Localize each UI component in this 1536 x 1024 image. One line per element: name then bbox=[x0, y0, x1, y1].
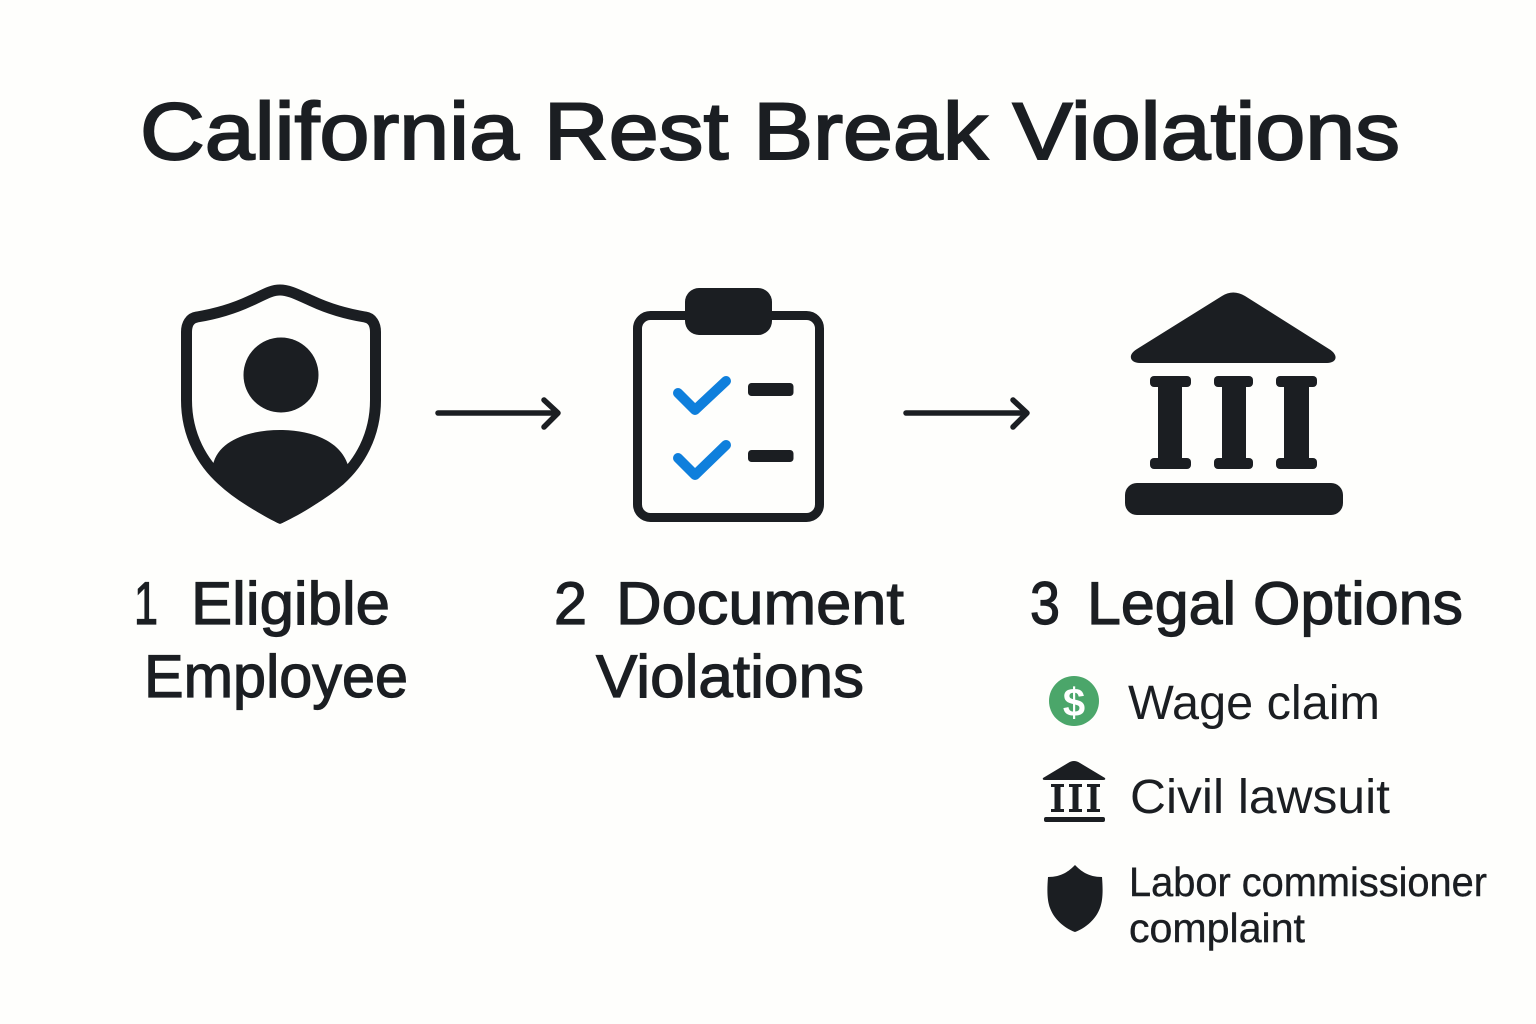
option: civil lawsuit bbox=[1043, 761, 1390, 824]
step 1 heading: Eligible bbox=[191, 570, 390, 637]
label: wage claim: Wage claim bbox=[1128, 677, 1380, 730]
icon: green dollar coin bbox=[1049, 676, 1099, 726]
option: wage claim bbox=[1049, 676, 1380, 730]
step 2 heading: 2 bbox=[554, 570, 587, 637]
step 1 heading bbox=[134, 570, 408, 710]
step 3: legal options bbox=[1030, 292, 1487, 951]
step 2 heading: Document bbox=[616, 570, 904, 637]
step 3 heading: Legal Options bbox=[1087, 570, 1463, 637]
icon: clipboard checklist bbox=[638, 288, 820, 518]
step 2: document violations bbox=[554, 288, 904, 710]
icon: green dollar coin: $ bbox=[1063, 681, 1085, 725]
step 1: eligible employee bbox=[134, 290, 408, 710]
arrow: step 2 to step 3 bbox=[906, 400, 1027, 427]
step 3 heading: 3 bbox=[1030, 570, 1060, 637]
step 2 heading: Violations bbox=[596, 643, 864, 710]
arrow: step 1 to step 2 bbox=[438, 400, 558, 427]
icon: courthouse bbox=[1125, 292, 1343, 515]
label: labor commissioner complaint bbox=[1129, 859, 1487, 951]
label: labor commissioner complaint: complaint bbox=[1129, 905, 1306, 951]
icon: shield with person bbox=[186, 290, 376, 524]
title: California Rest Break Violations bbox=[140, 87, 1400, 177]
label: labor commissioner complaint: Labor commissioner bbox=[1129, 859, 1487, 905]
step 2 heading bbox=[554, 570, 904, 710]
icon: small shield bbox=[1047, 865, 1103, 932]
label: civil lawsuit: Civil lawsuit bbox=[1130, 771, 1390, 824]
option: labor commissioner complaint bbox=[1047, 859, 1487, 951]
step 1 heading: 1 bbox=[134, 570, 158, 637]
icon: small courthouse bbox=[1043, 761, 1105, 822]
step 1 heading: Employee bbox=[144, 643, 408, 710]
